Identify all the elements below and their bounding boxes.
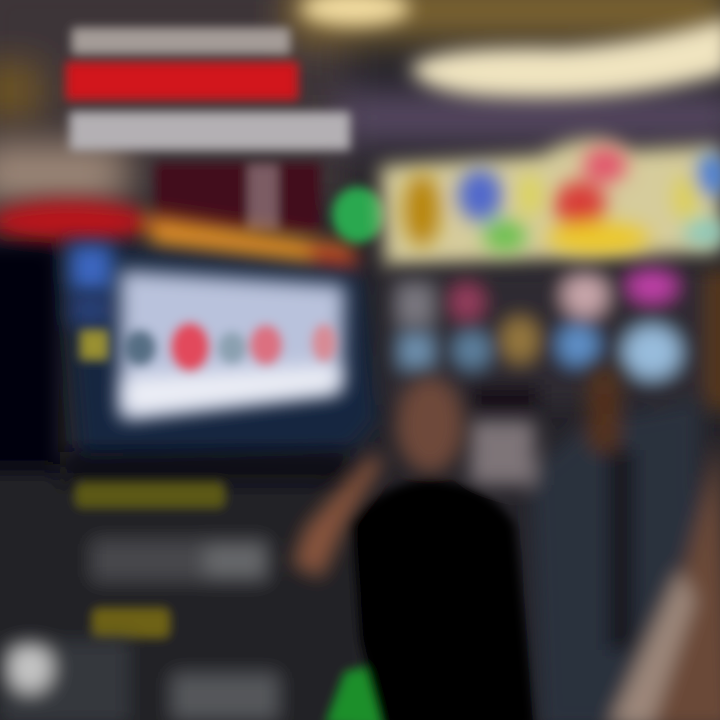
grey panel [0,538,280,720]
reel symbols [124,323,336,371]
head [396,377,464,473]
screen display [120,270,345,418]
ceiling background [0,0,720,210]
green light [332,187,384,243]
person seated at the machine [292,377,535,720]
left black cabinet edge [0,245,58,565]
screen frame [62,240,378,465]
console below screen [0,452,370,720]
yellow button labels [75,482,225,508]
torso [352,480,535,720]
row of distant machines [385,268,720,410]
casino sign [66,28,350,231]
green stool glow [325,662,385,720]
right side crowd [470,368,720,720]
arm [292,458,385,578]
ceiling lights [300,0,720,98]
colourful marquee panel [380,139,720,268]
marquee band over screen [0,200,358,274]
slot machine screen [62,240,378,465]
